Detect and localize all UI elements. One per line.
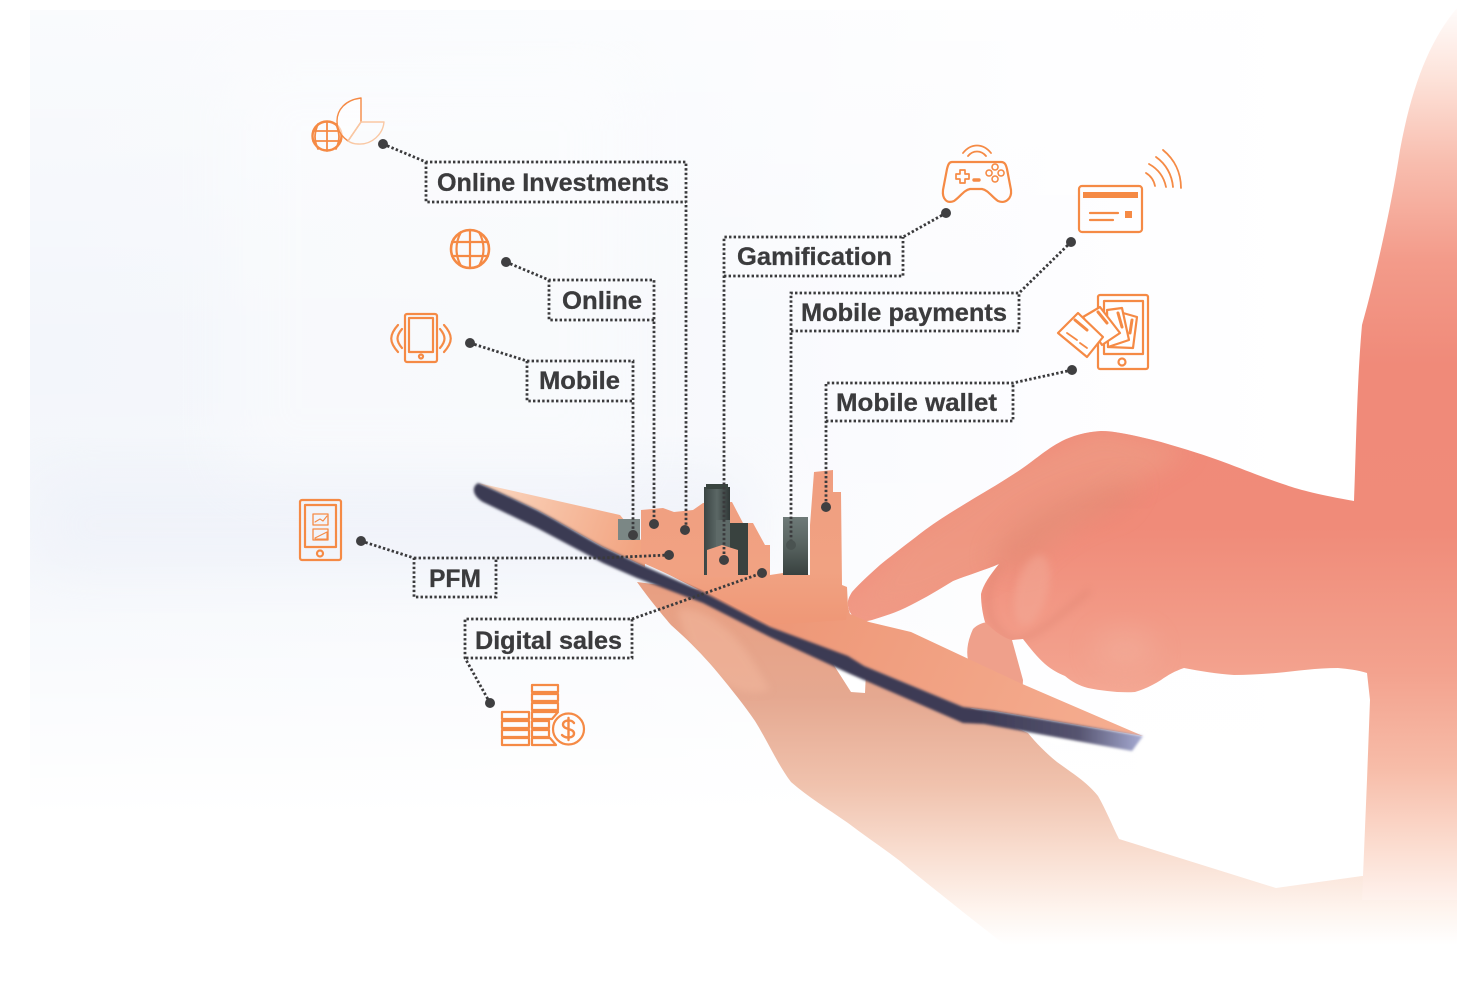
label: Gamification: Gamification xyxy=(737,243,892,271)
icon: coin stacks with dollar xyxy=(502,685,584,745)
dark building right xyxy=(783,517,808,575)
label: Mobile: Mobile xyxy=(539,367,620,395)
finger shading xyxy=(880,431,1169,640)
connector: Mobile wallet xyxy=(821,365,1077,512)
dark tower xyxy=(704,484,748,575)
gap between fingers and tablet xyxy=(828,656,866,693)
icon: globe xyxy=(451,230,489,268)
small grey building xyxy=(618,519,640,540)
finger behind tablet screen xyxy=(967,622,1023,700)
connector: Mobile xyxy=(465,338,638,540)
label: Online: Online xyxy=(562,287,642,315)
label: Digital sales: Digital sales xyxy=(475,627,622,655)
connector: PFM xyxy=(356,536,674,597)
label: PFM: PFM xyxy=(429,565,481,593)
tablet side edge xyxy=(474,483,1143,751)
connector: Online Investments xyxy=(378,139,690,535)
tablet screen right xyxy=(640,560,1143,736)
connector: Mobile payments xyxy=(786,237,1076,550)
tablet xyxy=(474,483,1143,751)
icon: vibrating phone xyxy=(391,314,451,362)
icon: PFM tablet with charts xyxy=(300,500,341,560)
city skyline xyxy=(618,470,848,625)
icon: mobile wallet xyxy=(1058,295,1148,369)
front peach building xyxy=(707,545,738,577)
label: Mobile payments: Mobile payments xyxy=(801,299,1007,327)
icon: globe with pie chart xyxy=(312,98,384,151)
label: Mobile wallet: Mobile wallet xyxy=(836,389,998,417)
connector: Digital sales xyxy=(465,568,767,708)
gap under tablet tip xyxy=(1028,733,1075,745)
connector: Online xyxy=(501,257,659,529)
icon: game controller xyxy=(943,146,1011,202)
icon: contactless card xyxy=(1079,150,1181,232)
label: Online Investments: Online Investments xyxy=(437,169,669,197)
background: blurred office backdrop xyxy=(30,145,773,613)
right arm, sleeve and hand with pointing finger xyxy=(845,8,1457,900)
left hand holding tablet xyxy=(637,582,1457,945)
peach skyline silhouette xyxy=(641,470,848,625)
tablet screen left xyxy=(478,483,645,567)
connector: Gamification xyxy=(719,208,951,565)
